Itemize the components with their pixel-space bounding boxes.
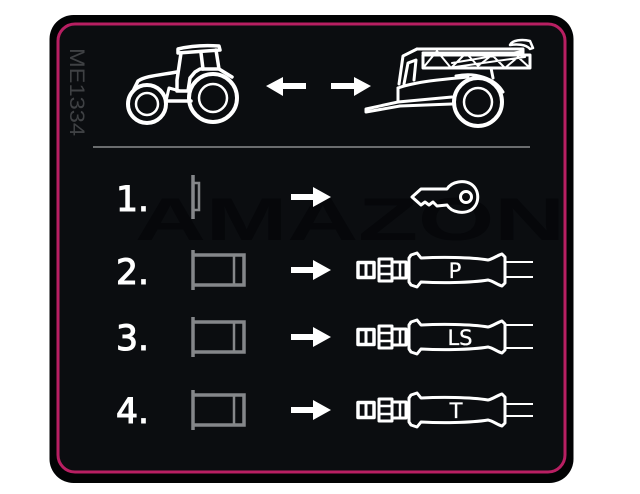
arrow: right <box>331 77 371 96</box>
icon: key <box>412 182 478 212</box>
black decal background <box>50 15 574 483</box>
step 2 housing <box>193 250 244 290</box>
step 3 arrow <box>291 327 331 347</box>
step 1 housing <box>193 175 199 219</box>
step 1 arrow <box>291 187 331 207</box>
icon: LS hose coupling: LS <box>447 326 473 350</box>
icon: sprayer <box>366 40 533 126</box>
step 2 number: 2. <box>116 253 149 293</box>
watermark: AMAZONE: AMAZON <box>135 186 565 253</box>
step 3 number: 3. <box>116 319 149 359</box>
step 1 number: 1. <box>116 180 149 220</box>
icon: LS hose coupling <box>358 320 533 354</box>
divider line <box>93 146 530 148</box>
step 4 arrow <box>291 400 331 420</box>
step 2 arrow <box>291 260 331 280</box>
step 3 housing <box>193 317 244 357</box>
icon: P hose coupling: P <box>449 259 461 283</box>
step 4 number: 4. <box>116 392 149 432</box>
part number: ME1334 <box>65 48 88 136</box>
icon: tractor <box>128 46 237 123</box>
panel: pink border <box>58 24 565 472</box>
icon: T hose coupling: T <box>449 399 463 423</box>
step 4 housing <box>193 390 244 430</box>
arrow: left <box>266 77 306 96</box>
icon: T hose coupling <box>358 393 533 427</box>
icon: P hose coupling <box>358 253 533 287</box>
